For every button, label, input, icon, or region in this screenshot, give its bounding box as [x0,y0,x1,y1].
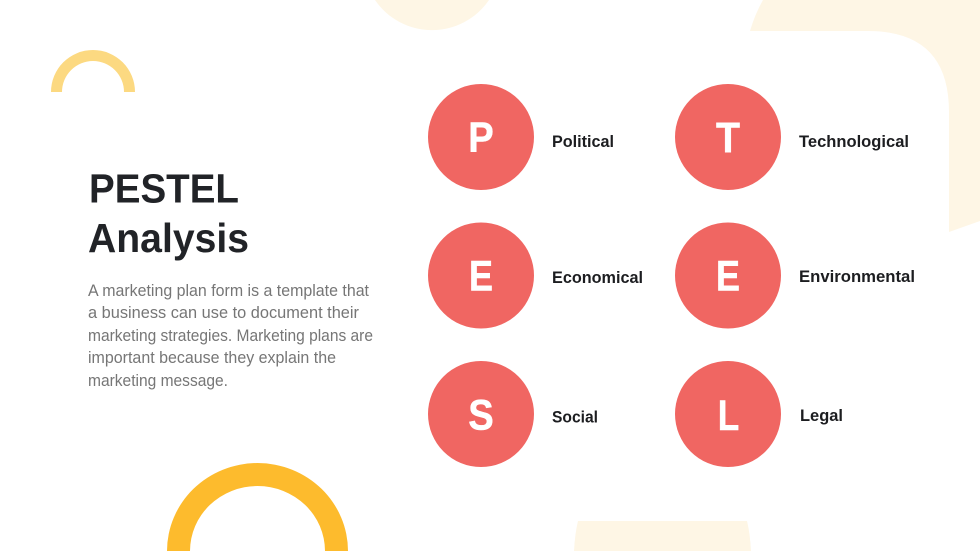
item: Environmental: Environmental [799,267,915,286]
item: Environmental: E [716,252,740,300]
shape: top cream circle [375,0,489,30]
body text: A marketing plan form is a template that [88,282,369,300]
item: Social [428,361,598,467]
item: Environmental [675,222,915,328]
shape: bottom cream tab [574,521,751,551]
body text [88,282,373,390]
item: Economical: E [469,252,493,300]
item: Social: Social [552,408,598,426]
title [88,166,249,261]
item: Technological [675,84,909,190]
item: Legal: Legal [800,406,843,425]
shape: top-right cream frame [750,0,980,232]
item: Legal: L [718,392,739,440]
item: Legal [675,361,843,467]
item: Political: Political [552,132,614,151]
title: PESTEL [89,166,239,212]
shape: yellow arc [51,50,135,92]
item: Political: P [468,114,494,162]
body text: marketing message. [88,372,228,390]
item: Economical [428,222,643,328]
item: Technological: Technological [799,132,909,151]
body text: important because they explain the [88,349,336,367]
shape: orange ring [167,463,348,551]
item: Political [428,84,614,190]
item: Social: S [468,392,494,440]
body text: marketing strategies. Marketing plans are [88,327,373,345]
title: Analysis [88,215,249,261]
item: Technological: T [716,114,740,162]
body text: a business can use to document their [88,304,359,322]
item: Economical: Economical [552,268,643,287]
